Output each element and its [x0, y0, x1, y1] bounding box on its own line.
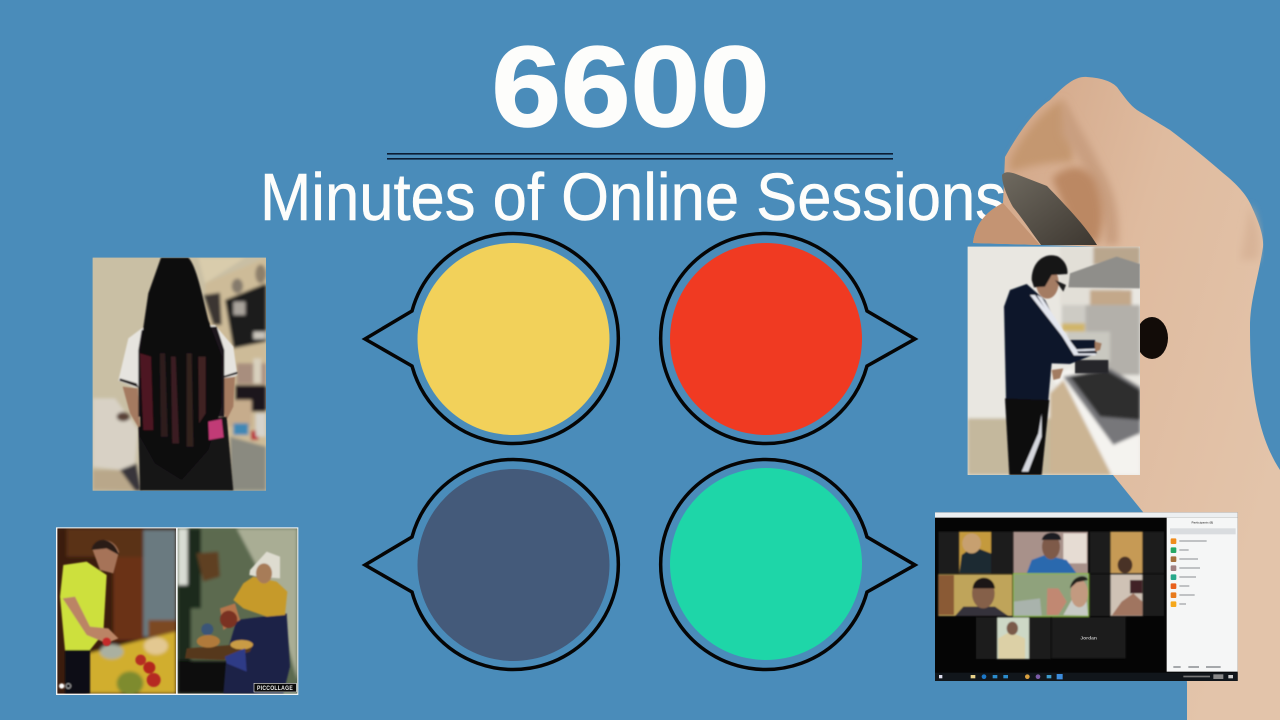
title: 6600: 6600	[492, 24, 770, 151]
marker end cap	[1136, 317, 1168, 359]
photo: student with long hair from behind	[93, 258, 266, 491]
participants panel	[1167, 518, 1238, 672]
video tiles	[938, 532, 1164, 659]
subtitle: Minutes of Online Sessions	[260, 160, 1006, 235]
right collage painting	[178, 528, 297, 694]
speech bubble: red	[661, 234, 915, 443]
photo collage: student with food and The Milkmaid	[56, 527, 298, 695]
screenshot: video call grid with participants: Jordan	[1080, 636, 1097, 642]
speech bubble: teal	[661, 460, 915, 670]
screenshot: video call grid with participants	[935, 512, 1238, 681]
left collage photo	[57, 528, 176, 695]
photo: student cooking at stove	[968, 247, 1140, 475]
taskbar	[935, 673, 1238, 681]
hand holding marker	[973, 77, 1280, 720]
marker body	[1002, 172, 1097, 245]
participants panel: Participants (8)	[1192, 520, 1213, 524]
right collage painting: PICCOLLAGE	[257, 686, 293, 692]
speech bubble: yellow	[365, 234, 618, 443]
speech bubble: navy	[365, 460, 618, 670]
title divider double line	[387, 153, 893, 160]
